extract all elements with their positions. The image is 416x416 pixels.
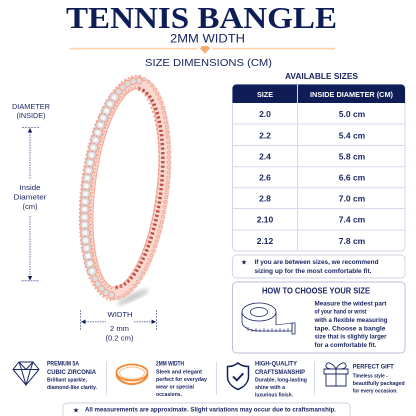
table header (232, 84, 405, 103)
feature: cubic zirconia: PREMIUM 5A (47, 361, 79, 368)
size table: SIZE (257, 92, 273, 99)
size table: 2.4 (259, 152, 271, 162)
diameter dimension: (INSIDE) (16, 111, 46, 120)
feature: 2mm width: wear or special (155, 384, 194, 390)
feature: cubic zirconia: Brilliant sparkle, (47, 378, 87, 384)
size table: 2.12 (257, 236, 274, 246)
size table: 2.10 (257, 215, 274, 225)
size table: 6.6 cm (339, 173, 366, 183)
feature: cubic zirconia: CUBIC ZIRCONIA (47, 369, 96, 376)
feature: 2mm width: perfect for everyday (156, 377, 208, 383)
inner prongs (114, 89, 173, 292)
tape instructions: size that is slightly larger (314, 334, 387, 341)
size table: 5.8 cm (339, 152, 366, 162)
title: TENNIS BANGLE (66, 0, 337, 35)
feature: craftsmanship: HIGH-QUALITY (255, 361, 298, 368)
feature: perfect gift: PERFECT GIFT (353, 364, 394, 370)
diameter dimension: (cm) (22, 202, 38, 211)
size table: 5.4 cm (339, 130, 366, 140)
panel: how to choose your size: HOW TO CHOOSE YOUR SIZE (262, 287, 371, 296)
feature: cubic zirconia: diamond-like clarity. (47, 385, 97, 391)
section heading: SIZE DIMENSIONS (CM) (145, 57, 272, 69)
size table: 2.2 (259, 130, 271, 140)
width dimension (80, 310, 156, 342)
tape instructions: with a flexible measuring (314, 317, 388, 324)
sizing note: If you are between sizes, we recommend (254, 259, 379, 266)
size table: 7.8 cm (339, 236, 366, 246)
icon: orange ring (116, 364, 148, 384)
size table: 2.8 (259, 194, 271, 204)
back stones (112, 78, 180, 303)
size table: 2.6 (259, 173, 271, 183)
subtitle: 2MM WIDTH (170, 34, 245, 46)
feature: 2mm width: Sleek and elegant (156, 370, 202, 376)
diameter heading: DIAMETER (12, 102, 51, 111)
tape instructions: of your hand or wrist (314, 309, 367, 316)
icon: gift box (324, 363, 348, 386)
tape instructions: tape. Choose a bangle (314, 325, 386, 332)
front stones (114, 78, 139, 100)
tape instructions: for a comfortable fit. (314, 342, 377, 349)
sizing note (232, 255, 405, 278)
feature: craftsmanship: CRAFTSMANSHIP (255, 369, 306, 376)
size table: INSIDE DIAMETER (CM) (310, 92, 393, 99)
diameter label: Inside (20, 183, 40, 192)
feature: craftsmanship: Durable, long-lasting (255, 378, 307, 384)
size table: 7.0 cm (339, 194, 366, 204)
icon: measuring tape (242, 303, 295, 334)
divider with diamond (70, 46, 335, 54)
feature: craftsmanship (228, 361, 307, 398)
size table (232, 84, 405, 251)
sizing note: ★ (241, 258, 247, 266)
shadow (116, 287, 150, 307)
icon: diamond (13, 362, 39, 385)
sizing note: sizing up for the most comfortable fit. (254, 268, 372, 275)
diameter dimension (12, 102, 51, 281)
diameter dimension: Diameter (14, 192, 47, 202)
feature: perfect gift: beautifully packaged (353, 381, 405, 387)
bangle illustration (68, 70, 180, 307)
footer note: ★ (73, 406, 79, 414)
prongs between stones (76, 95, 114, 273)
feature: craftsmanship: shine with a (255, 385, 286, 391)
size table: 5.0 cm (339, 109, 366, 119)
front prong fringe (68, 70, 140, 300)
feature: perfect gift: Timeless style - (353, 373, 388, 379)
footer note (63, 403, 350, 416)
feature: 2mm width: occasions. (156, 392, 182, 398)
size table: 2.0 (259, 109, 271, 119)
width dimension: 2 mm (110, 324, 129, 333)
feature: 2mm width (116, 361, 208, 398)
feature: craftsmanship: luxurious finish. (255, 392, 293, 398)
feature: perfect gift (324, 363, 405, 394)
width dimension: WIDTH (108, 310, 132, 319)
width dimension: (0.2 cm) (106, 334, 134, 342)
feature: perfect gift: for every occasion. (353, 388, 398, 394)
tape instructions (314, 300, 388, 349)
feature: cubic zirconia (13, 361, 97, 391)
feature: 2mm width: 2MM WIDTH (156, 361, 184, 368)
size table: 7.4 cm (339, 215, 366, 225)
front settings (114, 78, 139, 100)
tape instructions: Measure the widest part (314, 300, 387, 307)
icon: shield (228, 363, 248, 390)
footer note: All measurements are approximate. Slight variations may occur due to craftsmanship. (85, 407, 336, 414)
panel: how to choose your size (232, 282, 405, 353)
table heading: AVAILABLE SIZES (285, 72, 359, 81)
